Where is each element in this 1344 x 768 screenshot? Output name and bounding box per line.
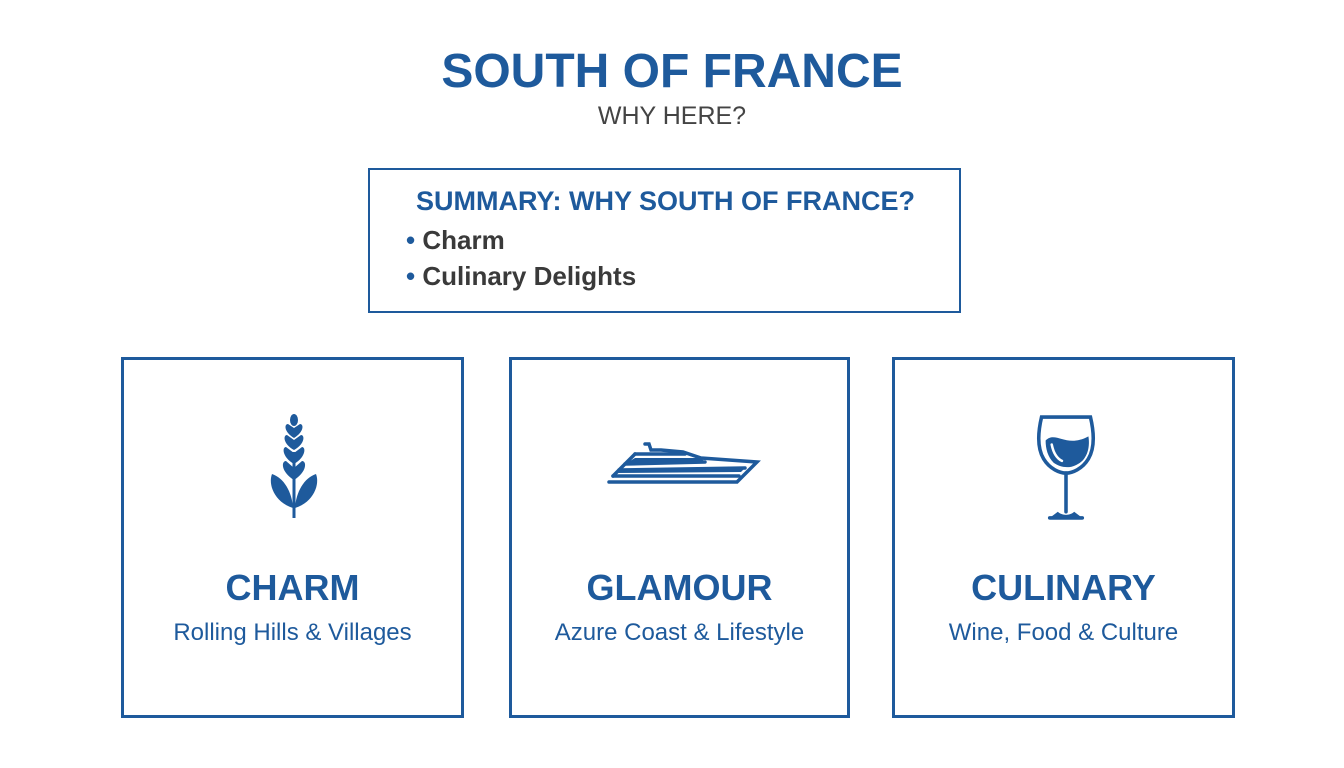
panel: charm: CHARM <box>226 567 359 608</box>
panel: glamour: Azure Coast & Lifestyle <box>555 619 804 646</box>
icon: yacht <box>607 442 761 484</box>
panel: charm <box>121 357 464 718</box>
summary box <box>368 168 961 313</box>
panel: glamour: GLAMOUR <box>586 567 772 608</box>
summary heading: SUMMARY: WHY SOUTH OF FRANCE? <box>416 186 915 216</box>
title: SOUTH OF FRANCE <box>441 45 903 98</box>
panel: charm: Rolling Hills & Villages <box>173 619 412 646</box>
icon: lavender <box>270 414 318 518</box>
panel: culinary: CULINARY <box>971 567 1156 608</box>
panel: culinary: Wine, Food & Culture <box>949 619 1178 646</box>
summary bullets <box>406 225 636 291</box>
subtitle: WHY HERE? <box>598 102 746 130</box>
summary bullets: • Culinary Delights <box>406 261 636 291</box>
icon: wine glass <box>1036 415 1096 520</box>
panel: culinary <box>892 357 1235 718</box>
summary bullets: • Charm <box>406 225 505 255</box>
panel: glamour <box>509 357 850 718</box>
